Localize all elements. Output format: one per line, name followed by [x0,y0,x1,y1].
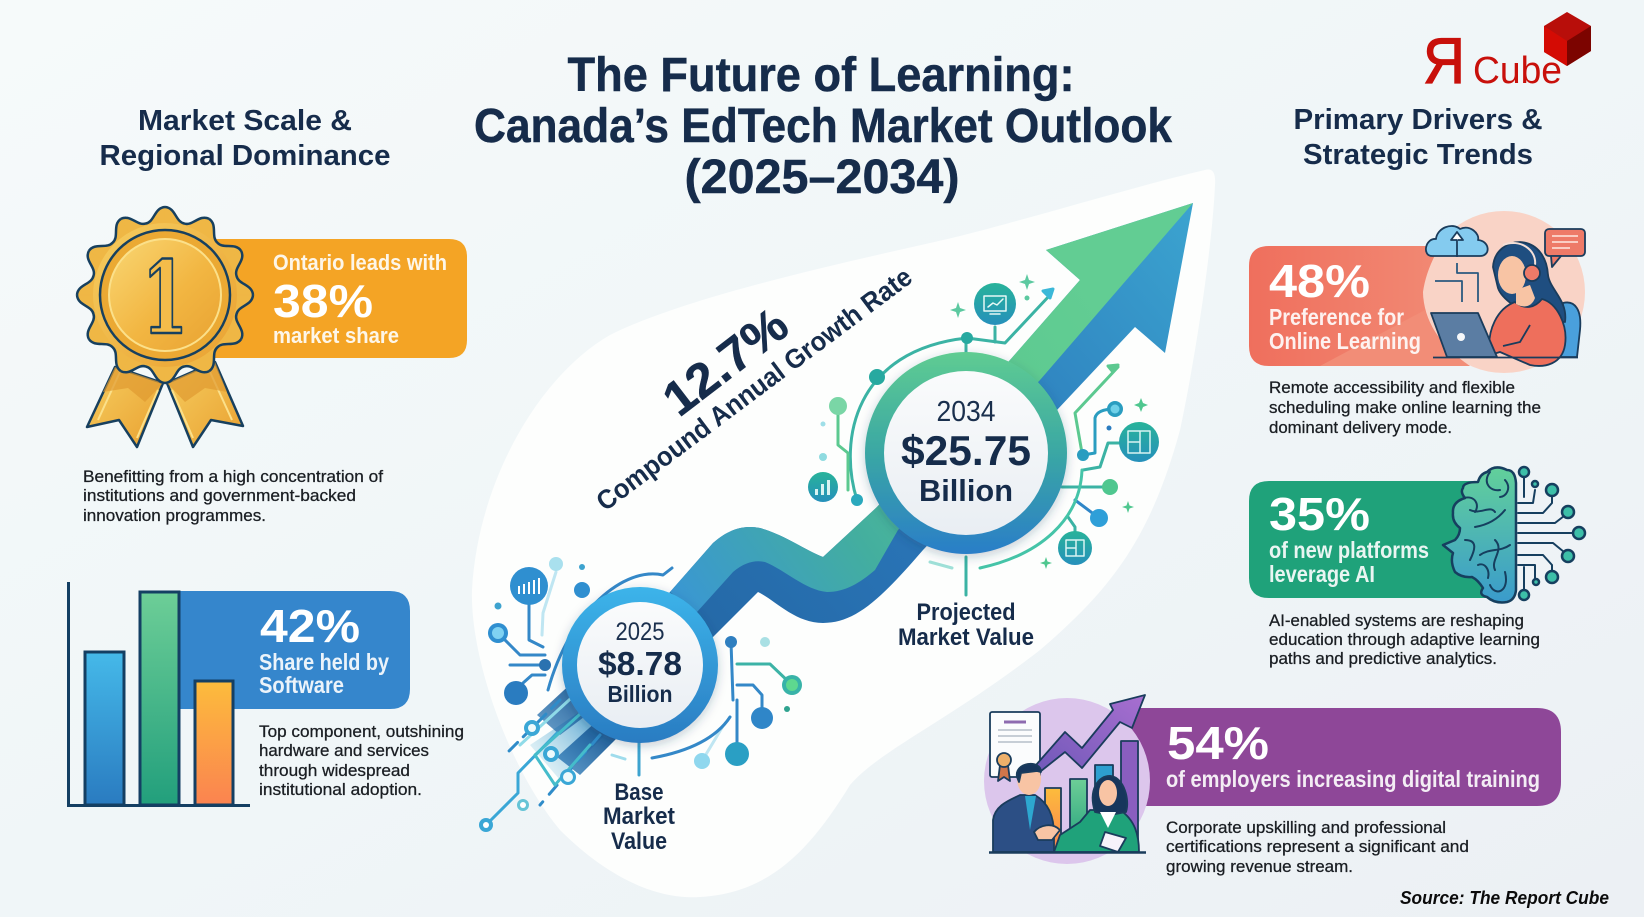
icon: gold medal: 1 [142,239,188,357]
circuit: base node network [479,557,802,832]
text: online description: Remote accessibility and flexible [1269,378,1515,397]
panel: employer training [984,695,1561,876]
text: software description: hardware and services [259,741,429,760]
heading: primary drivers [1294,104,1543,171]
arrow: growth trajectory [530,203,1193,780]
green callout: of new platforms [1269,537,1429,563]
text: online description: dominant delivery mode. [1269,418,1452,437]
title [474,49,1172,204]
blue callout: Software [259,672,344,698]
text: Ontario description [83,467,383,525]
text: Ontario description: institutions and government-backed [83,486,356,505]
label: base market value: Base [614,779,664,806]
circle: 2034 projected value: Billion [919,473,1013,508]
icon: AI brain [1443,467,1585,602]
title: (2025–2034) [684,151,960,204]
coral callout: Online Learning [1269,328,1421,354]
label: projected market value: Market Value [898,624,1034,651]
growth rate label: Compound Annual Growth Rate [591,262,918,517]
title: Canada’s EdTech Market Outlook [474,100,1172,153]
label: base market value [603,779,675,855]
blue callout: Share held by [259,649,389,675]
purple callout [1130,708,1561,806]
panel: online learning [1249,211,1585,437]
label: projected market value: Projected [916,599,1016,626]
circle: 2034 projected value: $25.75 [901,427,1031,474]
green callout: leverage AI [1269,561,1375,587]
blue callout: 42% [260,600,360,652]
label: base market value: Market [603,803,675,830]
text: software description [259,722,464,799]
text: software description: through widespread [259,761,410,780]
label: projected market value [898,599,1034,651]
purple callout: 54% [1167,717,1269,769]
logo: RCube [1423,12,1591,97]
text: AI description: education through adaptive learning [1269,630,1540,649]
text: employer description: Corporate upskilling and professional [1166,818,1446,837]
coral callout: Preference for [1269,304,1404,330]
icon: gold medal [67,197,263,447]
text: AI description: paths and predictive analytics. [1269,649,1497,668]
coral callout: 48% [1269,255,1370,307]
heading: primary drivers: Primary Drivers & [1294,104,1543,136]
circle: 2025 base value [562,587,718,743]
logo: RCube: Я [1423,24,1465,97]
circle: 2025 base value: Billion [608,681,672,707]
label: base market value: Value [611,828,667,855]
heading: market scale: Market Scale & [138,105,352,137]
growth rate label: 12.7% [653,298,798,427]
circle: 2034 projected value [865,352,1067,554]
orange callout [205,239,467,358]
green callout: 35% [1269,488,1370,540]
text: online description [1269,378,1541,437]
panel: Ontario market share [67,197,467,525]
text: AI description: AI-enabled systems are reshaping [1269,611,1524,630]
panel: central white blob [472,170,1215,897]
circle: 2025 base value: $8.78 [598,645,682,682]
circle: 2025 base value: 2025 [616,618,664,646]
text: Ontario description: innovation programmes. [83,506,266,525]
orange callout: Ontario leads with [273,250,447,275]
heading: market scale [100,105,390,172]
text: employer description: growing revenue stream. [1166,857,1353,876]
panel: AI platforms [1249,467,1585,668]
text: Ontario description: Benefitting from a high concentration of [83,467,383,486]
text: employer description [1166,818,1469,876]
bar chart [68,582,250,806]
text: software description: Top component, outshining [259,722,464,741]
text: software description: institutional adoption. [259,780,422,799]
text: AI description [1269,611,1540,668]
orange callout: 38% [273,275,373,327]
icon: peach circle backdrop [1423,211,1585,373]
green callout [1249,481,1490,598]
circuit: projected node network [808,274,1159,595]
text: employer description: certifications represent a significant and [1166,837,1469,856]
heading: market scale: Regional Dominance [100,140,390,172]
coral callout [1249,246,1470,366]
icon: business handshake with growth chart [984,695,1150,864]
blue callout [179,591,410,709]
text: online description: scheduling make online learning the [1269,398,1541,417]
heading: primary drivers: Strategic Trends [1303,139,1533,171]
logo: RCube: Cube [1473,50,1562,92]
title: The Future of Learning: [568,49,1074,102]
panel: software share [68,582,464,806]
source credit: Source: The Report Cube [1400,888,1609,908]
purple callout: of employers increasing digital training [1166,766,1540,792]
circle: 2034 projected value: 2034 [936,396,996,428]
icon: woman at laptop [1426,226,1585,366]
orange callout: market share [273,323,399,348]
